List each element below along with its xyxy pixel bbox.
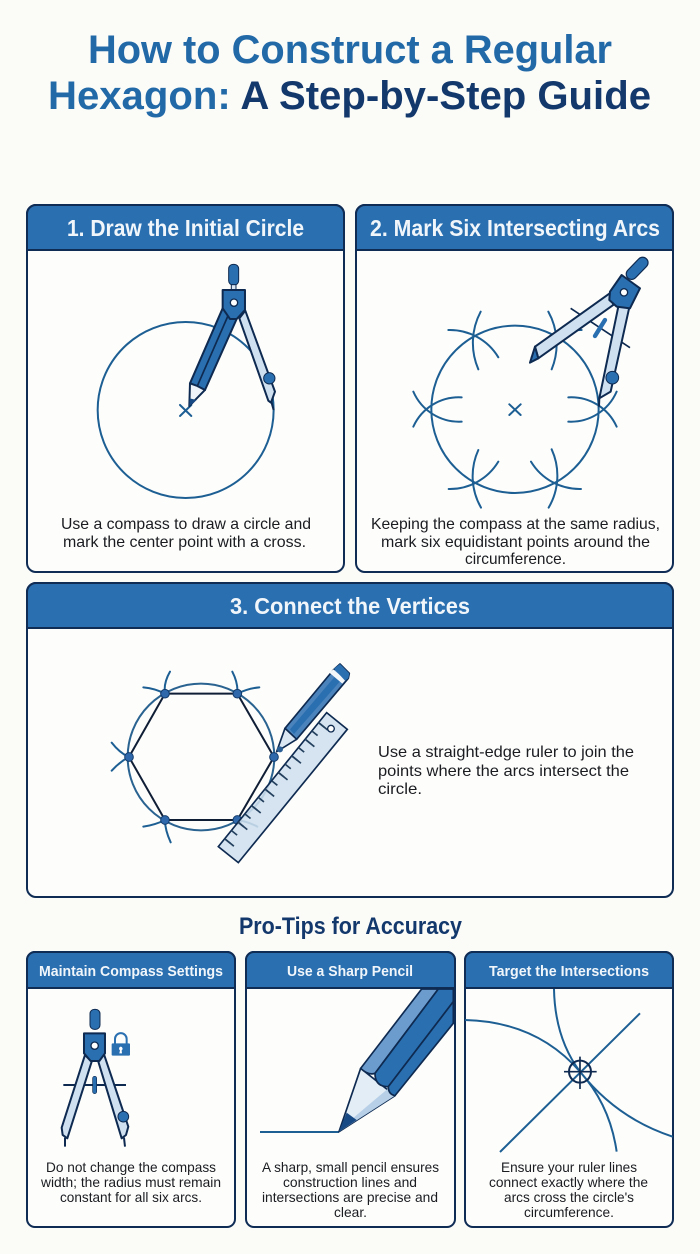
title: Hexagon: A Step-by-Step Guide <box>48 74 651 118</box>
text: tip 1 description: Do not change the compass <box>46 1159 216 1175</box>
icon: intersection target <box>465 989 673 1152</box>
icon: sharp pencil and line <box>260 989 453 1132</box>
text: tip 2 description: A sharp, small pencil ensures <box>262 1159 439 1175</box>
title <box>48 28 651 118</box>
text: tip 1 description <box>40 1159 221 1205</box>
illustration: circle with compass <box>98 264 275 498</box>
icon: compass <box>189 264 275 410</box>
illustration: hexagon with ruler and pencil <box>112 664 349 863</box>
text: tip 3 description: arcs cross the circle's <box>504 1189 634 1205</box>
text: step 2 description: mark six equidistant points around the <box>381 534 650 551</box>
text: step 1 description: mark the center point with a cross. <box>63 534 306 551</box>
heading: tip 3: Target the Intersections <box>489 963 649 980</box>
panel: tip 3 <box>465 952 673 1227</box>
text: tip 1 description: width; the radius must remain <box>40 1174 221 1190</box>
heading: step 2: 2. Mark Six Intersecting Arcs <box>370 215 660 241</box>
heading: tip 1: Maintain Compass Settings <box>39 963 223 980</box>
title: How to Construct a Regular <box>88 28 612 72</box>
text: tip 3 description: connect exactly where the <box>489 1174 648 1190</box>
arcs <box>413 312 617 508</box>
text: step 2 description: Keeping the compass at the same radius, <box>371 516 660 533</box>
hexagon <box>129 694 274 820</box>
text: step 3 description: circle. <box>378 781 422 798</box>
text: tip 2 description: clear. <box>334 1204 367 1220</box>
text: step 1 description: Use a compass to draw a circle and <box>61 516 311 533</box>
text: step 3 description <box>378 744 634 798</box>
panel: tip 1 <box>27 952 235 1227</box>
text: step 2 description <box>371 516 660 568</box>
text: tip 2 description: intersections are precise and <box>262 1189 438 1205</box>
panel: step 3 <box>27 583 673 897</box>
panel: step 2 <box>356 205 673 572</box>
arcs <box>112 672 259 842</box>
heading: pro-tips: Pro-Tips for Accuracy <box>239 913 463 940</box>
icon: pencil <box>277 664 349 752</box>
text: step 1 description <box>61 516 311 551</box>
text: tip 3 description <box>489 1159 648 1220</box>
text: step 3 description: points where the arcs intersect the <box>378 763 629 780</box>
icon: compass <box>530 263 643 407</box>
heading: step 1: 1. Draw the Initial Circle <box>67 215 304 241</box>
text: step 3 description: Use a straight-edge ruler to join the <box>378 744 634 761</box>
heading: step 3: 3. Connect the Vertices <box>230 593 470 619</box>
icon: ruler <box>218 713 347 863</box>
text: tip 3 description: Ensure your ruler lines <box>501 1159 637 1175</box>
panel: tip 2 <box>246 952 455 1227</box>
panel: step 1 <box>27 205 344 572</box>
text: tip 1 description: constant for all six arcs. <box>60 1189 202 1205</box>
text: tip 2 description <box>262 1159 439 1220</box>
heading: tip 2: Use a Sharp Pencil <box>287 963 413 980</box>
text: tip 2 description: construction lines and <box>283 1174 417 1190</box>
vertices <box>125 689 278 824</box>
illustration: circle with six arcs and compass <box>413 263 643 508</box>
text: step 2 description: circumference. <box>465 551 566 568</box>
icon: compass with lock <box>62 1009 130 1147</box>
icon: lock <box>112 1033 130 1056</box>
text: tip 3 description: circumference. <box>524 1204 614 1220</box>
